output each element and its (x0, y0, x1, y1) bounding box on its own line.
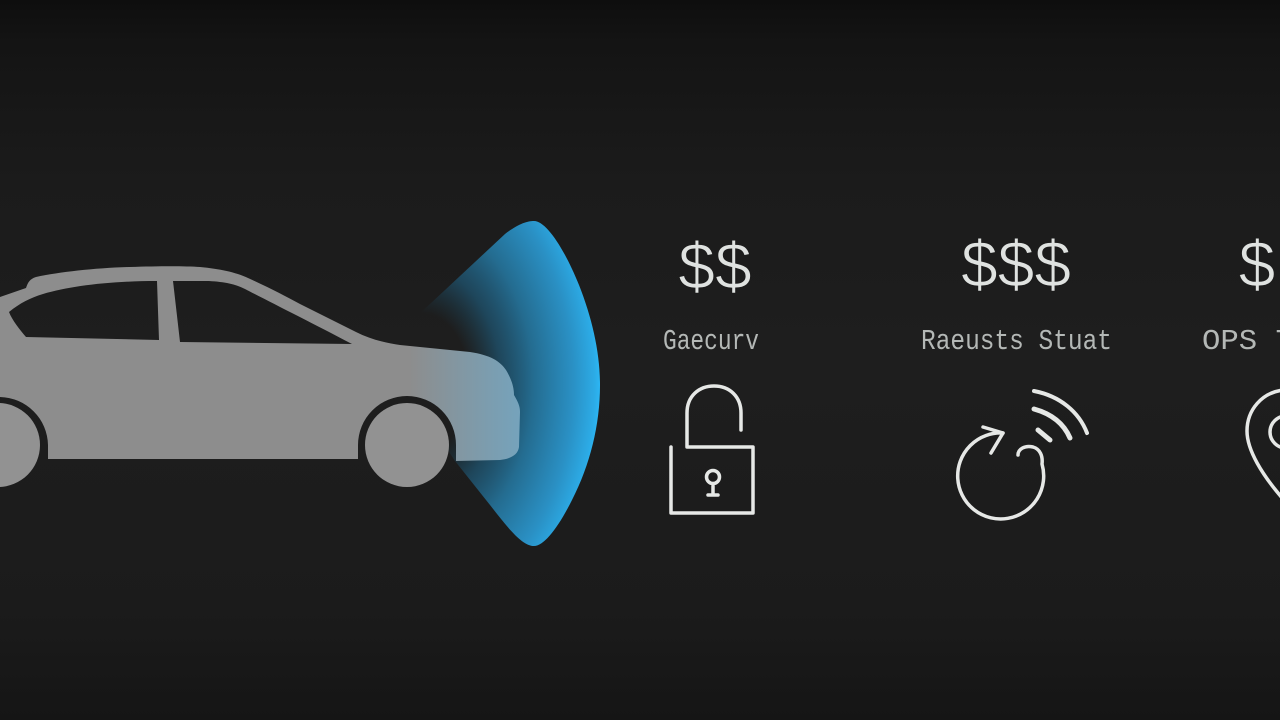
icon: open padlock (671, 386, 753, 513)
column: gps tracking (cut off at edge) (1202, 227, 1280, 500)
icon: remote start with signal (958, 391, 1087, 519)
label: security: Gaecurv (663, 325, 759, 358)
price: one dollar: $ (1239, 227, 1275, 301)
car silhouette (0, 266, 520, 487)
column: security (663, 229, 759, 513)
label: remote start: Raeusts Stuat (921, 325, 1112, 358)
front wheel (365, 403, 449, 487)
icon: map pin (1247, 390, 1280, 500)
light beam (415, 221, 600, 546)
column: remote start (921, 227, 1112, 519)
rear wheel (0, 403, 40, 487)
car body (0, 266, 520, 461)
price: two dollars: $$ (678, 229, 752, 303)
price: three dollars: $$$ (961, 227, 1071, 301)
